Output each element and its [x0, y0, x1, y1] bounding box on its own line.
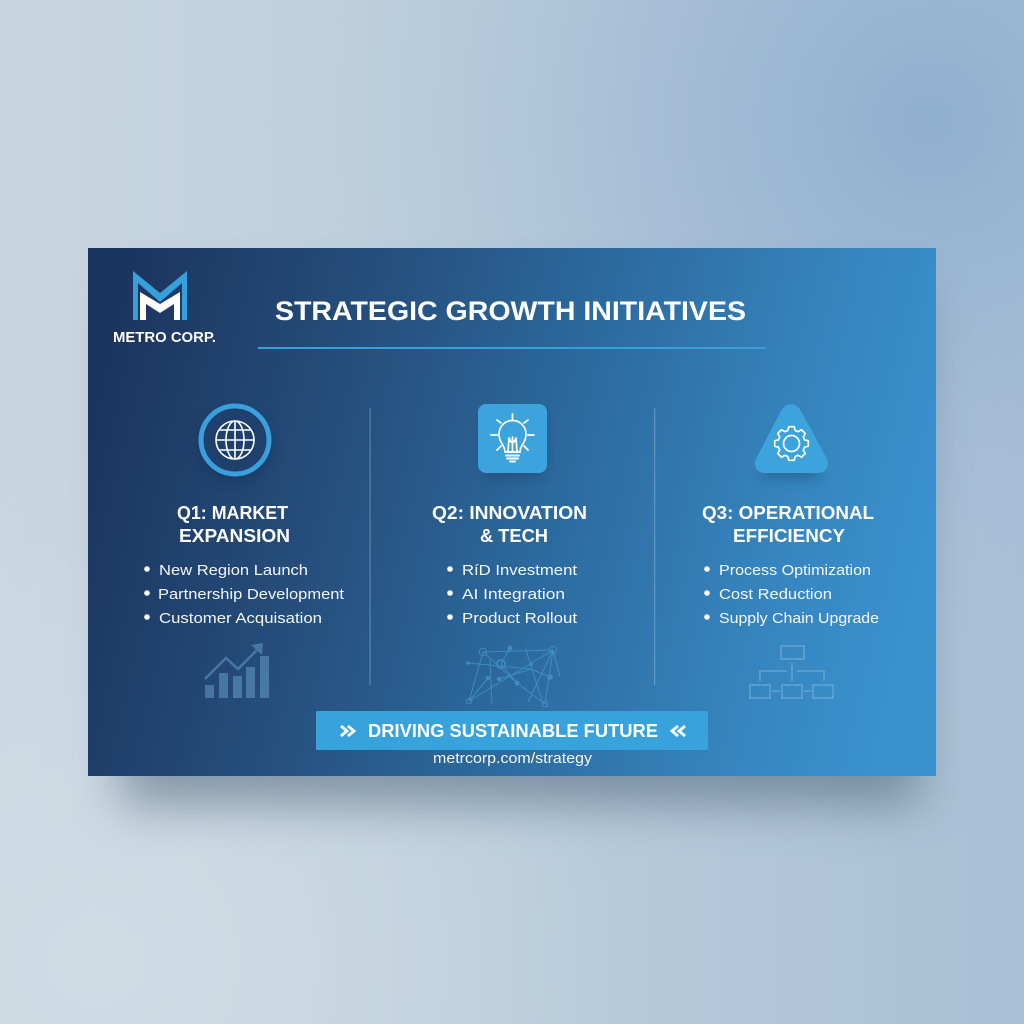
panel: main card — [88, 248, 936, 776]
title underline — [258, 347, 766, 349]
logo: Metro Corp — [113, 271, 216, 346]
icon: right chevrons — [341, 726, 354, 736]
Q2 bullet list: Product Rollout — [462, 610, 578, 627]
Q3 bullet list: Process Optimization — [719, 562, 871, 579]
Q2 heading: Q2: INNOVATION — [432, 503, 587, 523]
banner: driving sustainable future — [316, 711, 708, 750]
panel: Q3 operational efficiency — [702, 404, 879, 698]
Q2 bullet list: RíD Investment — [462, 562, 578, 579]
Q3 heading: EFFICIENCY — [733, 526, 845, 546]
Q2 bullet list — [447, 562, 578, 627]
Q1 bullet list — [144, 562, 345, 627]
divider right — [654, 408, 655, 685]
divider left — [370, 408, 371, 685]
icon: org chart — [750, 646, 833, 698]
Q1 bullet list: Customer Acquisation — [159, 610, 322, 627]
Q3 bullet list: Supply Chain Upgrade — [719, 610, 879, 627]
panel: Q1 market expansion — [144, 406, 345, 698]
icon: left chevrons — [672, 726, 685, 736]
Q3 bullet list: Cost Reduction — [719, 586, 832, 603]
Q1 bullet list: Partnership Development — [158, 586, 345, 603]
Q1 bullet list: New Region Launch — [159, 562, 308, 579]
website url: metrcorp.com/strategy — [433, 751, 593, 767]
icon: growth bar chart — [205, 643, 269, 698]
icon: light bulb tile — [478, 404, 547, 478]
panel: Q2 innovation and tech — [432, 404, 587, 707]
card shadow — [120, 290, 920, 805]
Q2 bullet list: AI Integration — [462, 586, 565, 603]
icon: M logo — [133, 271, 187, 320]
Q1 heading: EXPANSION — [179, 526, 290, 546]
Q1 heading: Q1: MARKET — [177, 503, 288, 523]
Q3 heading: Q3: OPERATIONAL — [702, 503, 874, 523]
title: STRATEGIC GROWTH INITIATIVES — [275, 296, 746, 326]
Q1 heading — [177, 503, 290, 546]
Q3 bullet list — [704, 562, 879, 627]
icon: globe in ring — [199, 406, 271, 482]
logo wordmark: METRO CORP. — [113, 330, 216, 346]
icon: gear in rounded triangle — [755, 404, 828, 478]
Q3 heading — [702, 503, 874, 546]
icon: network graph — [466, 646, 560, 707]
banner text: DRIVING SUSTAINABLE FUTURE — [368, 721, 658, 741]
Q2 heading — [432, 503, 587, 546]
Q2 heading: & TECH — [480, 526, 548, 546]
